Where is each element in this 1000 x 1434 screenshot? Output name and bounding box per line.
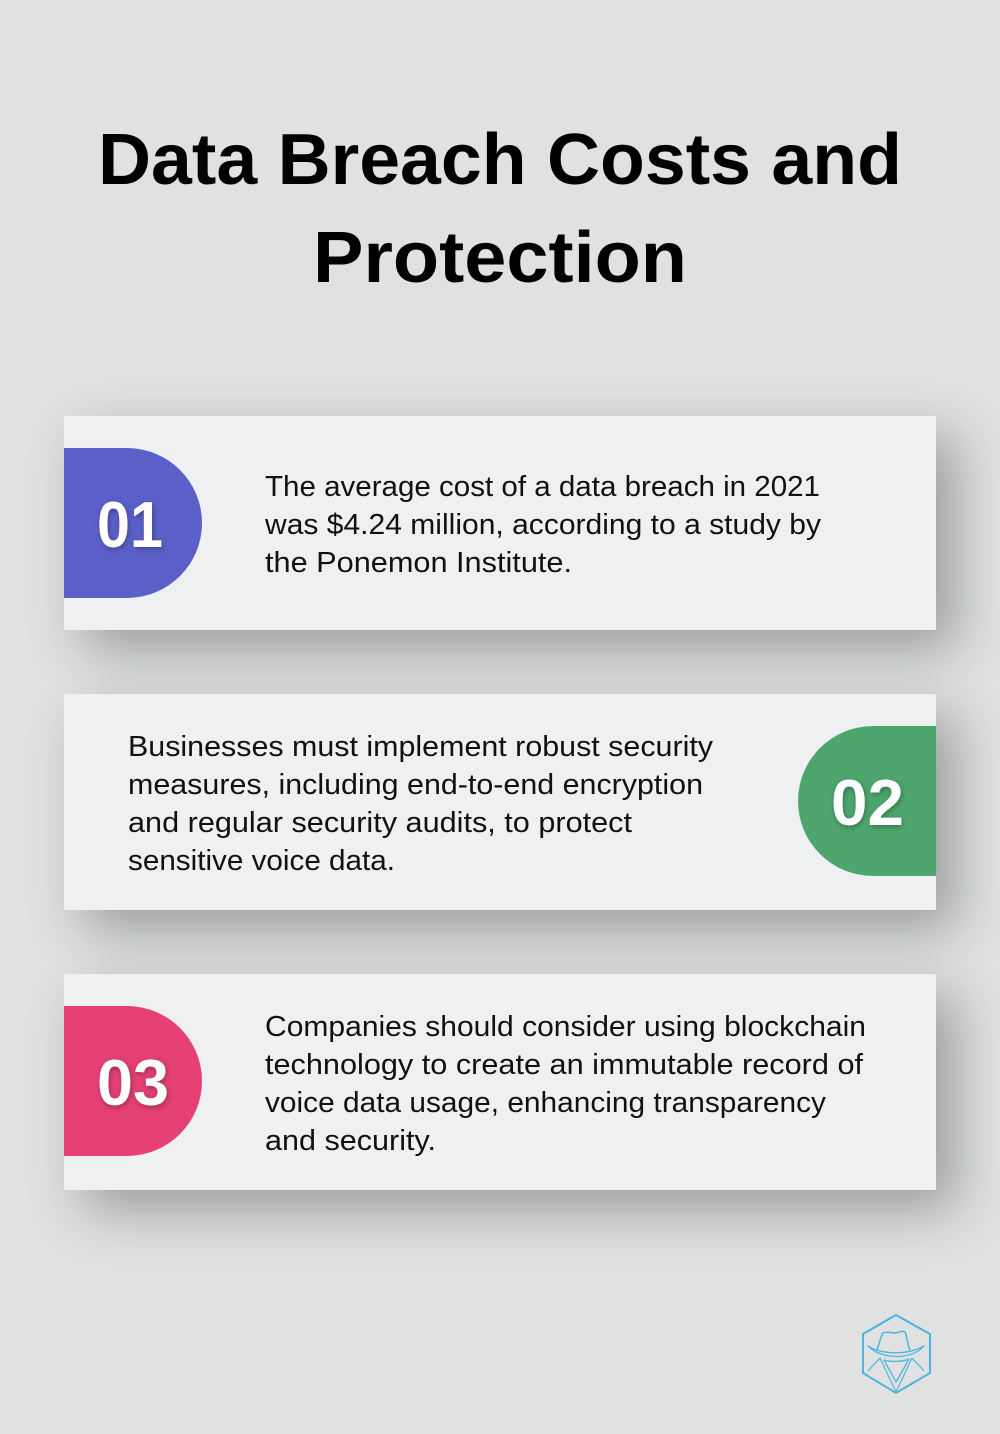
number badge 03: [64, 1006, 202, 1156]
text: robust security measures: sensitive voice data.: [128, 845, 395, 877]
text: average cost of a breach: was $4.24 million, according to a study by: [264, 509, 822, 541]
title: [98, 120, 902, 298]
text: blockchain record: voice data usage, enhancing transparency: [265, 1087, 827, 1119]
text: average cost of a breach: [264, 471, 822, 579]
number badge 02: [798, 726, 936, 876]
text: robust security measures: Businesses must implement robust security: [128, 731, 714, 763]
number badge 03: 03: [97, 1046, 169, 1119]
text: blockchain record: Companies should consider using blockchain: [265, 1011, 866, 1043]
panel: card 01: [64, 416, 936, 630]
text: robust security measures: and regular security audits, to protect: [128, 807, 632, 839]
title: Data Breach Costs and: [98, 120, 902, 200]
panel: card 03: [64, 974, 936, 1190]
text: robust security measures: measures, including end-to-end encryption: [128, 769, 703, 801]
text: robust security measures: [128, 731, 714, 877]
number badge 01: [64, 448, 202, 598]
number badge 02: 02: [831, 766, 904, 839]
text: average cost of a breach: the Ponemon Institute.: [265, 547, 572, 579]
text: blockchain record: technology to create an immutable record of: [265, 1049, 864, 1081]
text: average cost of a breach: The average cost of a data breach in 2021: [265, 471, 820, 503]
title: Protection: [313, 218, 687, 298]
icon: hexagon spy logo: [862, 1314, 931, 1394]
number badge 01: 01: [97, 488, 163, 561]
panel: card 02: [64, 694, 936, 910]
text: blockchain record: and security.: [265, 1125, 436, 1157]
